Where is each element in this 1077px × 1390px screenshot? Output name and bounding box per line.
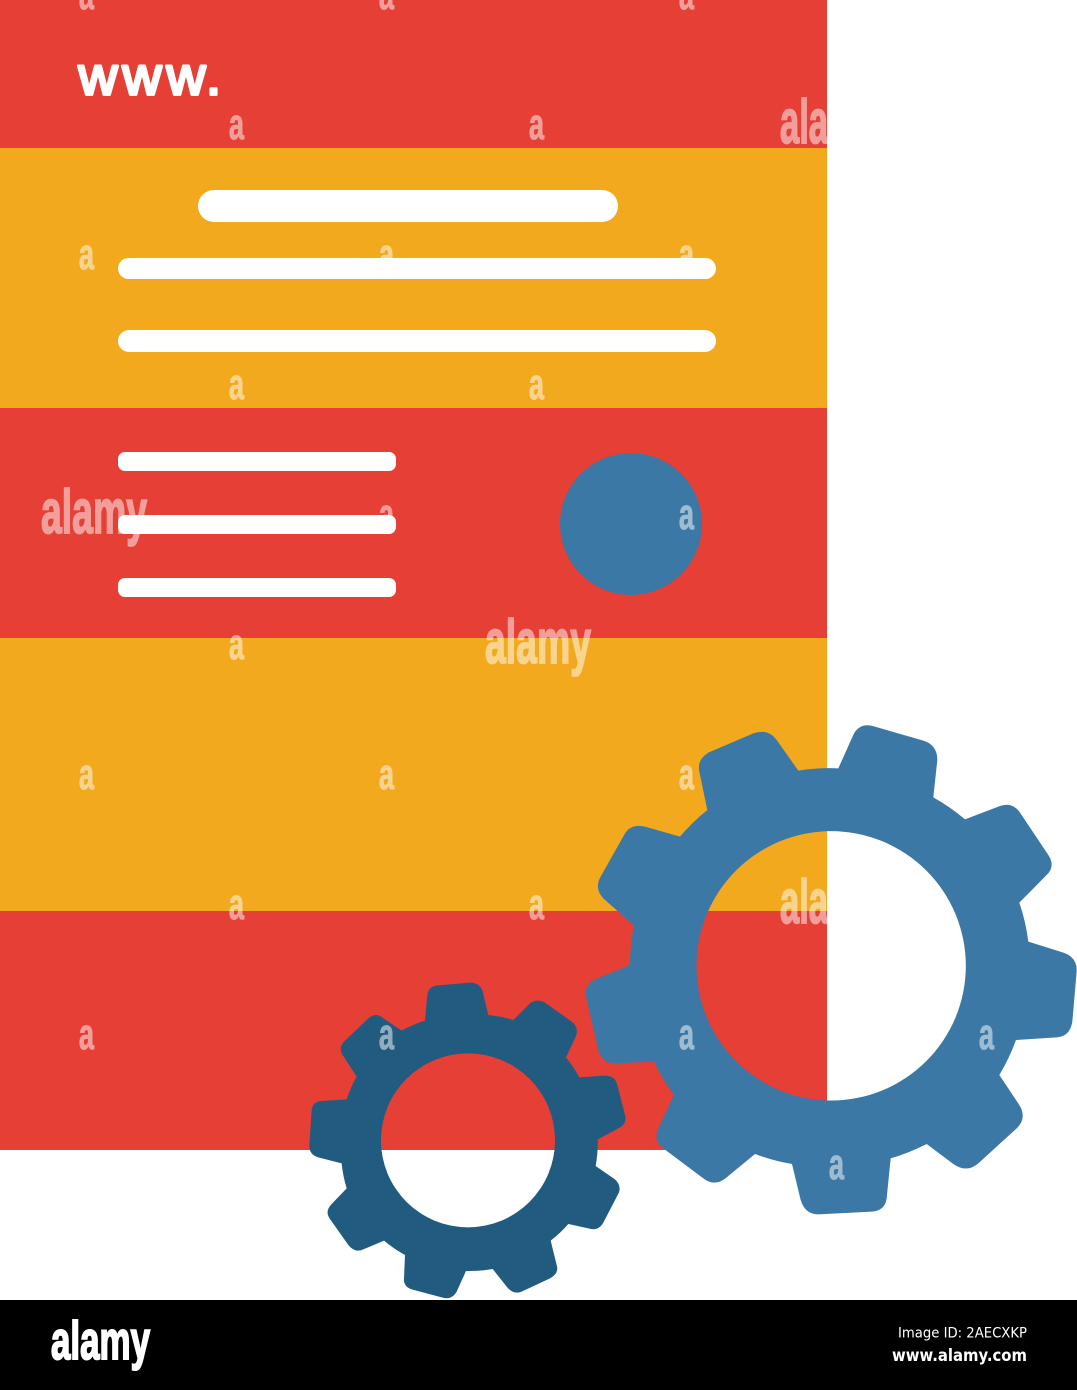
watermark pattern: alamy — [41, 478, 147, 547]
icon: large gear — [586, 725, 1077, 1214]
watermark pattern: a — [229, 359, 245, 409]
watermark pattern: a — [529, 359, 545, 409]
watermark pattern: a — [379, 1009, 395, 1059]
watermark pattern: a — [229, 619, 245, 669]
watermark pattern: a — [379, 229, 395, 279]
panel: header band with www: www. — [78, 46, 221, 106]
watermark pattern: a — [679, 749, 695, 799]
watermark pattern: a — [679, 1009, 695, 1059]
watermark pattern: a — [79, 749, 95, 799]
panel: web document page — [0, 0, 827, 1150]
panel: bottom red band — [0, 911, 827, 1150]
watermark pattern: a — [379, 749, 395, 799]
footer bar: Image ID: 2AECXKP — [898, 1326, 1027, 1342]
panel: empty amber band — [0, 638, 827, 911]
panel: header band with www — [0, 0, 827, 148]
icon: small gear — [309, 983, 625, 1298]
watermark pattern: a — [679, 229, 695, 279]
watermark pattern: a — [229, 879, 245, 929]
watermark pattern: a — [979, 1009, 995, 1059]
watermark pattern: a — [679, 489, 695, 539]
footer bar: alamy — [51, 1311, 150, 1371]
watermark pattern: ala — [780, 88, 828, 157]
panel: red band with text lines and circle — [0, 408, 827, 638]
watermark pattern: a — [829, 1139, 845, 1189]
watermark pattern: a — [79, 1009, 95, 1059]
watermark pattern: ala — [780, 868, 828, 937]
footer bar: www.alamy.com — [892, 1346, 1027, 1365]
watermark pattern: a — [79, 229, 95, 279]
watermark pattern — [41, 0, 995, 1189]
footer bar — [0, 1300, 1077, 1390]
watermark pattern: a — [529, 99, 545, 149]
watermark pattern: alamy — [485, 608, 591, 677]
panel: amber title band — [0, 148, 827, 408]
watermark pattern: a — [529, 879, 545, 929]
watermark pattern: a — [379, 489, 395, 539]
watermark pattern: a — [229, 99, 245, 149]
